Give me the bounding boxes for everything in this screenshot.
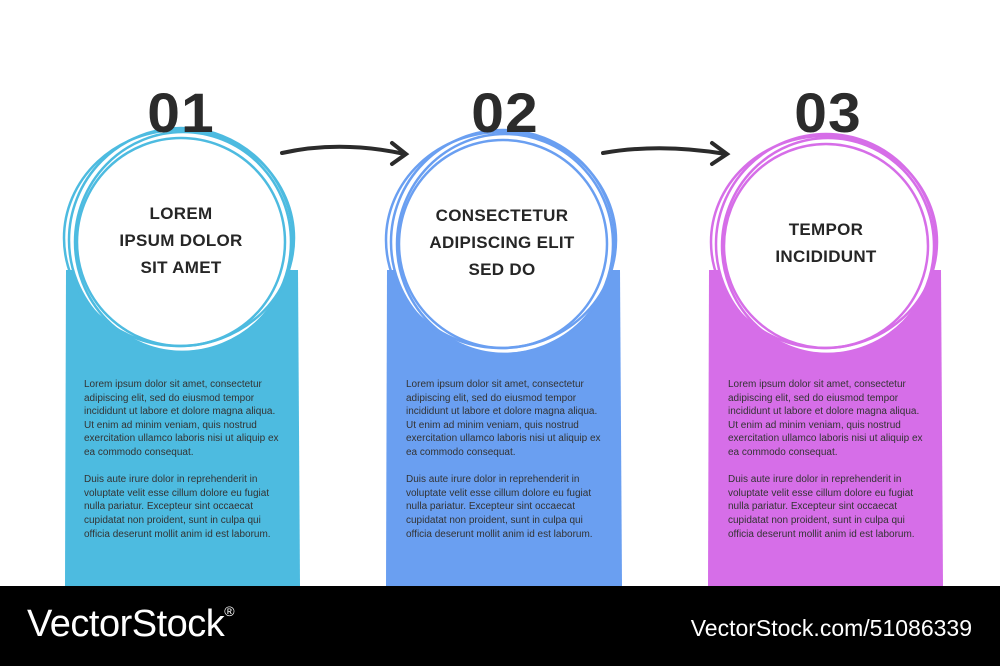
circle 1 (64, 128, 294, 352)
body text 1: Lorem ipsum dolor sit amet, consectetur adipiscing elit, sed do eiusmod tempor incididunt ut labore et dolore magna aliqua. Ut enim ad minim veniam, quis nostrud exercitation ullamco laboris nisi ut aliquip ex ea commodo consequat. (84, 379, 279, 458)
body text 2: Lorem ipsum dolor sit amet, consectetur adipiscing elit, sed do eiusmod tempor incididunt ut labore et dolore magna aliqua. Ut enim ad minim veniam, quis nostrud exercitation ullamco laboris nisi ut aliquip ex ea commodo consequat. (406, 379, 601, 458)
panel 3 fill (708, 270, 943, 586)
body text 3: Lorem ipsum dolor sit amet, consectetur adipiscing elit, sed do eiusmod tempor incididunt ut labore et dolore magna aliqua. Ut enim ad minim veniam, quis nostrud exercitation ullamco laboris nisi ut aliquip ex ea commodo consequat. (728, 379, 923, 458)
title 1: IPSUM DOLOR (119, 231, 243, 250)
title 1: LOREM (150, 204, 212, 223)
title 2: CONSECTETUR (436, 206, 568, 225)
number 02: 02 (471, 81, 539, 144)
body text 3: Duis aute irure dolor in reprehenderit in voluptate velit esse cillum dolore eu fugiat nulla pariatur. Excepteur sint occaecat cupidatat non proident, sunt in culpa qui officia deserunt mollit anim id est laborum. (728, 474, 915, 540)
body text 2: Duis aute irure dolor in reprehenderit in voluptate velit esse cillum dolore eu fugiat nulla pariatur. Excepteur sint occaecat cupidatat non proident, sunt in culpa qui officia deserunt mollit anim id est laborum. (406, 474, 593, 540)
body text 2 (406, 379, 601, 540)
circle 3 (711, 134, 937, 354)
footer logo: VectorStock® (27, 603, 234, 645)
title 2: ADIPISCING ELIT (429, 233, 575, 252)
number 01: 01 (147, 81, 215, 144)
panel 1 fill (65, 270, 300, 586)
footer url: VectorStock.com/51086339 (691, 615, 972, 641)
body text 3 (728, 379, 923, 540)
circle 2 (386, 130, 616, 354)
body text 1: Duis aute irure dolor in reprehenderit in voluptate velit esse cillum dolore eu fugiat nulla pariatur. Excepteur sint occaecat cupidatat non proident, sunt in culpa qui officia deserunt mollit anim id est laborum. (84, 474, 271, 540)
title 2 (429, 206, 575, 279)
arrow 2 (603, 143, 727, 164)
title 2: SED DO (468, 260, 535, 279)
title 1 (119, 204, 243, 277)
title 1: SIT AMET (140, 258, 222, 277)
footer bar (0, 586, 1000, 666)
body text 1 (84, 379, 279, 540)
arrow 1 (282, 143, 406, 164)
panel 2 fill (386, 270, 622, 586)
title 3: TEMPOR (789, 220, 863, 239)
number 03: 03 (794, 81, 862, 144)
title 3 (775, 220, 877, 266)
title 3: INCIDIDUNT (775, 247, 877, 266)
